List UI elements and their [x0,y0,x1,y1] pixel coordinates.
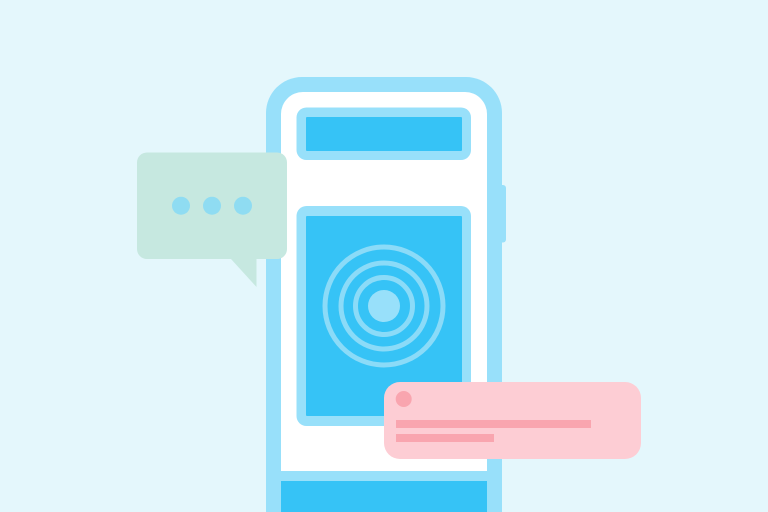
concentric rings icon [325,247,443,365]
notification card [384,382,641,459]
phone screen [281,92,487,471]
text line long [396,420,591,428]
bottom bar [281,481,487,512]
card body [384,382,641,459]
main content card [296,206,471,426]
notification dot [396,391,412,407]
top banner [296,108,471,160]
phone side button [498,185,506,242]
bubble body [137,152,287,287]
typing dots [172,197,252,215]
phone body [266,77,502,512]
phone [266,77,506,512]
chat bubble [137,152,287,287]
text line short [396,434,494,442]
